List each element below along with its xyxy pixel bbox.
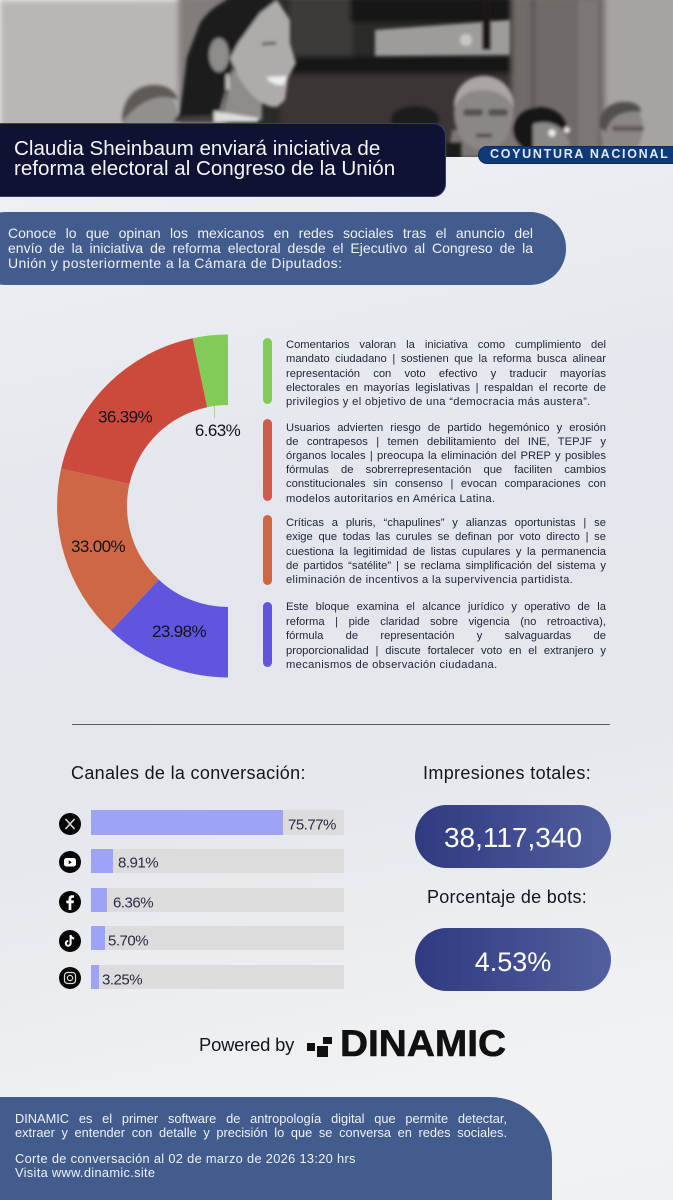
footer text: Visita www.dinamic.site (15, 1165, 155, 1180)
title text (14, 137, 395, 180)
icon: TikTok (59, 930, 81, 952)
footer text: extraer y entender con detalle y precisión lo que se conversa en redes sociales. (15, 1125, 507, 1140)
half donut chart (57, 334, 241, 678)
woman hair (173, 0, 280, 122)
intro text: Unión y posteriormente a la Cámara de Diputados: (8, 255, 342, 271)
legend text red: órganos locales | preocupa la eliminación del PREP y posibles (286, 450, 606, 462)
legend text orange: Críticas a pluris, “chapulines” y alianzas oportunistas | se (286, 517, 606, 529)
intro text (8, 225, 534, 271)
icon: Facebook (59, 891, 81, 913)
segment: 23.98% purple (111, 580, 228, 678)
legend text red (286, 422, 606, 505)
legend text orange (286, 517, 606, 586)
bar: X 75.77%: 75.77% (288, 816, 336, 833)
legend text green: privilegios y el objetivo de una “democracia más austera”. (286, 396, 591, 408)
legend marker orange (263, 515, 272, 585)
legend marker green (263, 338, 272, 404)
bar: X 75.77% (91, 810, 344, 835)
segment: 33.00% orange (57, 469, 159, 631)
icon: YouTube (59, 851, 81, 873)
legend text orange: exige que todas las curules se definan por voto directo | se (286, 531, 606, 543)
legend text purple: reforma | pide claridad sobre vigencia (no retroactiva), (286, 616, 606, 628)
label 23.98%: 23.98% (152, 622, 207, 641)
footer text: Corte de conversación al 02 de marzo de 2026 13:20 hrs (15, 1151, 356, 1166)
segment: 6.63% green (193, 334, 228, 407)
header photo (0, 0, 673, 157)
legend text purple (286, 601, 606, 671)
footer text (15, 1111, 507, 1180)
label 6.63%: 6.63% (195, 421, 241, 440)
legend marker red (263, 419, 272, 501)
bar: Instagram 3.25% (91, 965, 344, 989)
books (375, 20, 510, 56)
icon: X (59, 813, 81, 835)
heading: impresiones: Impresiones totales: (423, 763, 591, 783)
legend text orange: de partidos “satélite” | se reclama simplificación del sistema y (286, 560, 606, 572)
powered by (199, 1026, 506, 1060)
man right (601, 101, 643, 155)
bar: TikTok 5.70% (91, 926, 344, 950)
stat: impresiones totales (415, 805, 611, 868)
legend text orange: eliminación de incentivos a la supervivencia partidista. (286, 574, 573, 586)
legend text red: constitucionales sin consenso | evocan comparaciones con (286, 478, 606, 490)
legend text green: electorales en mayorías legislativas | respaldan el recorte de (286, 382, 606, 394)
woman face (230, 0, 296, 107)
legend text purple: proporcionalidad | discute fortalecer voto en el extranjero y (286, 644, 606, 656)
segment: 36.39% red (61, 338, 207, 484)
legend text red: Usuarios advierten riesgo de partido hegemónico y erosión (286, 422, 606, 434)
heading: bots: Porcentaje de bots: (427, 887, 587, 907)
bar: Instagram 3.25%: 3.25% (102, 972, 142, 988)
legend marker purple (263, 602, 272, 667)
legend text purple: fórmula de representación y salvaguardas de (286, 630, 606, 642)
legend text red: fórmulas de sobrerrepresentación que faciliten cambios (286, 464, 606, 476)
stat: porcentaje de bots: 4.53% (475, 947, 551, 977)
legend text purple: Este bloque examina el alcance jurídico y operativo de la (286, 601, 606, 613)
woman with glasses (513, 107, 567, 153)
powered by text: Powered by (199, 1034, 294, 1055)
background man left (122, 85, 178, 149)
stat: porcentaje de bots (415, 928, 611, 991)
title panel (0, 123, 446, 197)
legend text green: representación con voto efectivo y traducir mayorías (286, 368, 606, 380)
legend text green (286, 339, 606, 408)
footer text: DINAMIC es el primer software de antropología digital que permite detectar, (15, 1111, 507, 1126)
title text: Claudia Sheinbaum enviará iniciativa de (14, 137, 380, 160)
legend text orange: cuestiona la legitimidad de listas cupulares y la permanencia (286, 546, 606, 558)
bar: TikTok 5.70%: 5.70% (108, 932, 148, 950)
bar: YouTube 8.91%: 8.91% (118, 854, 158, 872)
title text: reforma electoral al Congreso de la Unión (14, 156, 395, 180)
legend text red: de contrapesos | temen debilitamiento del INE, TEPJF y (286, 436, 606, 448)
legend text purple: mecanismos de observación ciudadana. (286, 659, 498, 671)
bar: YouTube 8.91% (91, 849, 344, 873)
label 36.39%: 36.39% (98, 408, 153, 426)
stat: impresiones totales: 38,117,340 (444, 822, 582, 853)
intro text: Conoce lo que opinan los mexicanos en redes sociales tras el anuncio del (8, 225, 533, 241)
woman neck (222, 68, 262, 120)
intro panel (0, 212, 566, 285)
icon: Instagram (59, 967, 81, 989)
bar: Facebook 6.36% (91, 888, 344, 912)
heading: canales: Canales de la conversación: (71, 763, 306, 783)
legend text green: mandato ciudadano | sostienen que la reforma busca alinear (286, 353, 606, 365)
bald man (448, 130, 522, 157)
legend text red: modelos autoritarios en América Latina. (286, 493, 495, 505)
section tag: COYUNTURA NACIONAL (490, 147, 669, 161)
footer panel (0, 1097, 552, 1200)
bar: Facebook 6.36%: 6.36% (113, 894, 153, 912)
legend text green: Comentarios valoran la iniciativa como cumplimiento del (286, 339, 606, 351)
label 33.00%: 33.00% (71, 537, 126, 556)
intro text: envío de la iniciativa de reforma electoral desde el Ejecutivo al Congreso de la (8, 240, 533, 256)
